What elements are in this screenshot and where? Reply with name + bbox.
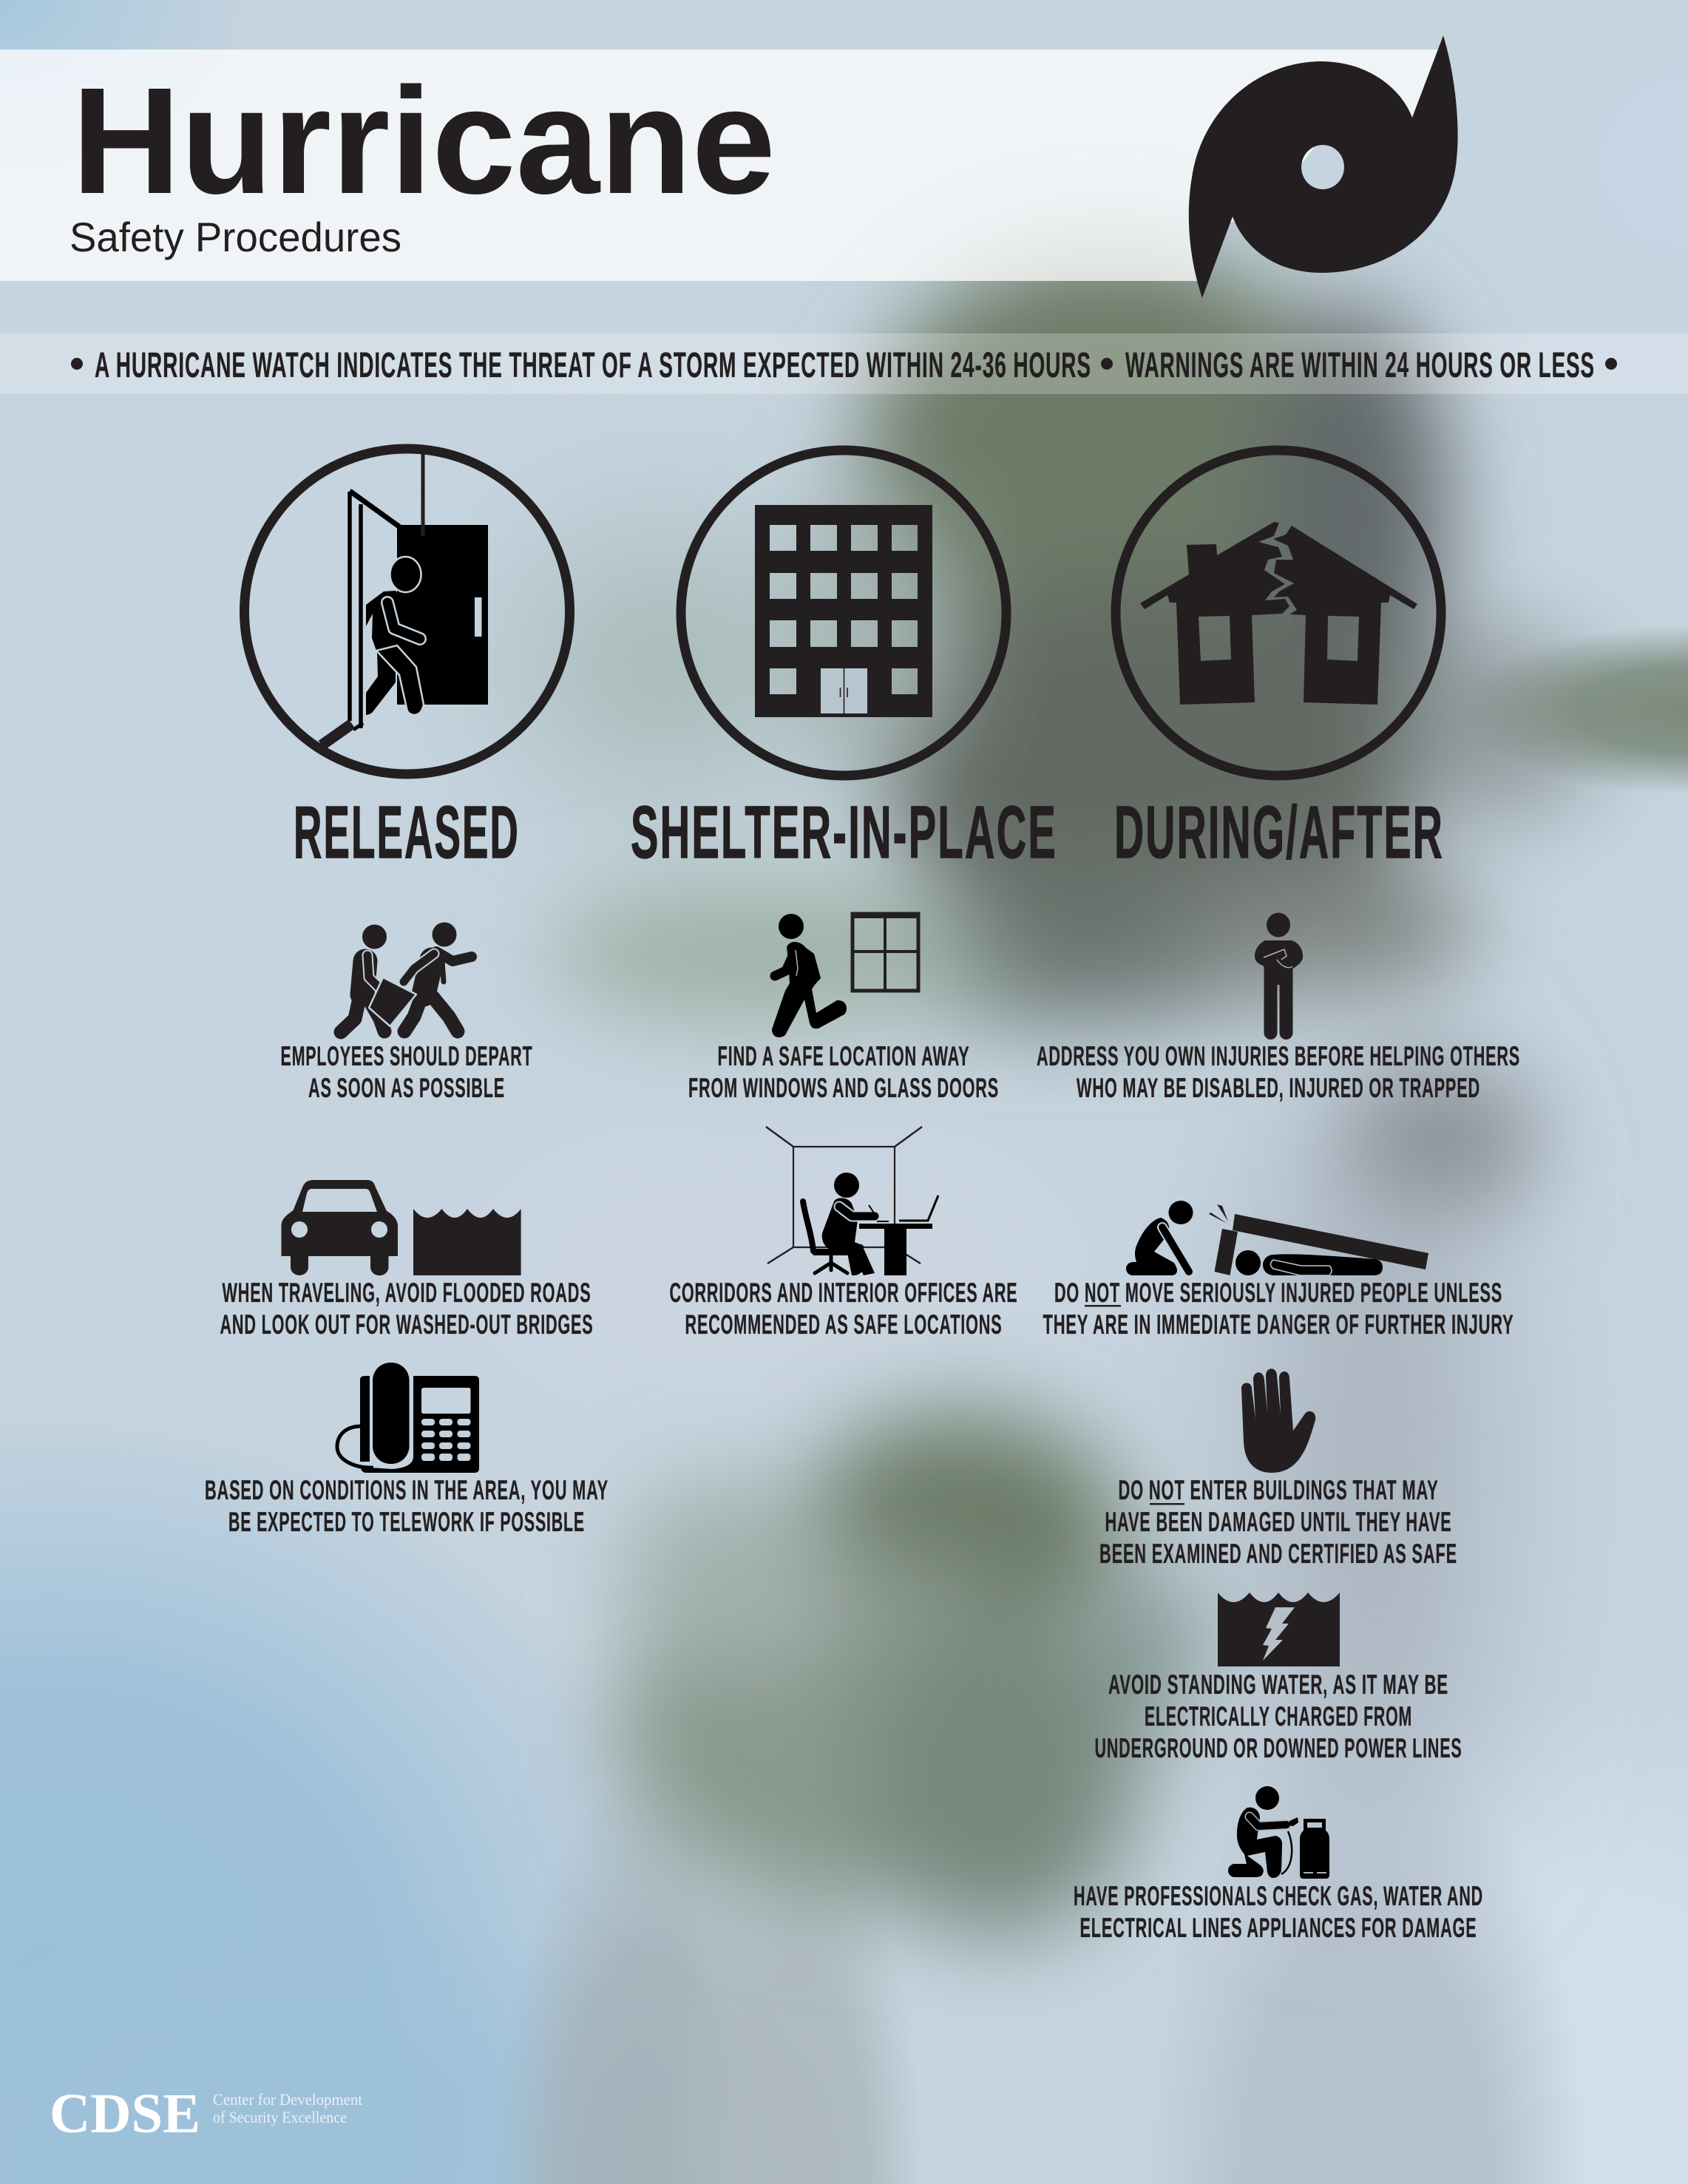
text: own injuries (1037, 1041, 1520, 1103)
icon: cracked house (1116, 450, 1441, 776)
icon: person leaving through door (244, 449, 569, 774)
text: standing water (1094, 1669, 1462, 1763)
icon: person checking own injuries (1255, 912, 1303, 1040)
panel: during/after column (1037, 450, 1520, 1943)
icon: raised stop hand (1241, 1369, 1315, 1473)
subtitle: Safety Procedures (70, 214, 401, 260)
text: standing water: ELECTRICALLY CHARGED FROM (1145, 1701, 1412, 1732)
text: depart (281, 1041, 532, 1103)
text: do not enter buildings: HAVE BEEN DAMAGED UNTIL THEY HAVE (1105, 1507, 1452, 1537)
logo: CDSE: of Security Excellence (213, 2108, 347, 2126)
text: do not move injured (1043, 1278, 1514, 1340)
logo: CDSE: CDSE (50, 2083, 200, 2145)
text: flooded roads (220, 1278, 593, 1340)
text: telework: BE EXPECTED TO TELEWORK IF POSSIBLE (228, 1507, 585, 1537)
text: depart: AS SOON AS POSSIBLE (308, 1073, 505, 1103)
icon: kneeling person and person under debris (1126, 1201, 1428, 1275)
text: safe location (688, 1041, 999, 1103)
text: standing water: AVOID STANDING WATER, AS IT MAY BE (1108, 1669, 1448, 1700)
text: do not enter buildings: DO NOT ENTER BUILDINGS THAT MAY (1118, 1475, 1439, 1505)
logo: CDSE (50, 2083, 362, 2145)
logo: CDSE: Center for Development (213, 2090, 362, 2109)
heading: shelter-in-place: SHELTER-IN-PLACE (631, 791, 1057, 874)
text: corridors: RECOMMENDED AS SAFE LOCATIONS (685, 1309, 1003, 1340)
text: do not enter buildings (1099, 1475, 1457, 1569)
text: professionals (1074, 1881, 1483, 1943)
watch and warning banner (0, 333, 1688, 394)
heading: released: RELEASED (294, 791, 520, 874)
text: safe location: FIND A SAFE LOCATION AWAY (717, 1041, 970, 1071)
text: depart: EMPLOYEES SHOULD DEPART (281, 1041, 532, 1071)
icon: person at desk in interior office (766, 1127, 938, 1275)
text: telework: BASED ON CONDITIONS IN THE AREA, YOU MAY (205, 1475, 609, 1505)
panel: shelter-in-place column (631, 450, 1057, 1340)
text: safe location: FROM WINDOWS AND GLASS DOORS (688, 1073, 999, 1103)
icon: office building (681, 450, 1006, 776)
text: corridors (670, 1278, 1017, 1340)
icon: hurricane symbol (1189, 35, 1458, 298)
title: Hurricane (72, 56, 776, 225)
icon: employees departing with briefcase (341, 923, 472, 1032)
text: telework (205, 1475, 609, 1537)
icon: electrified water (1218, 1593, 1340, 1666)
panel: released column (205, 449, 609, 1537)
icon: desk telephone (337, 1363, 479, 1473)
icon: person moving away from window (772, 914, 918, 1037)
text: corridors: CORRIDORS AND INTERIOR OFFICES ARE (670, 1278, 1017, 1308)
icon: car and flood water (281, 1180, 521, 1275)
text: flooded roads: WHEN TRAVELING, AVOID FLOODED ROADS (222, 1278, 592, 1308)
icon: technician checking gas tank (1228, 1786, 1329, 1879)
text: flooded roads: AND LOOK OUT FOR WASHED-OUT BRIDGES (220, 1309, 593, 1340)
header band (0, 50, 1442, 281)
